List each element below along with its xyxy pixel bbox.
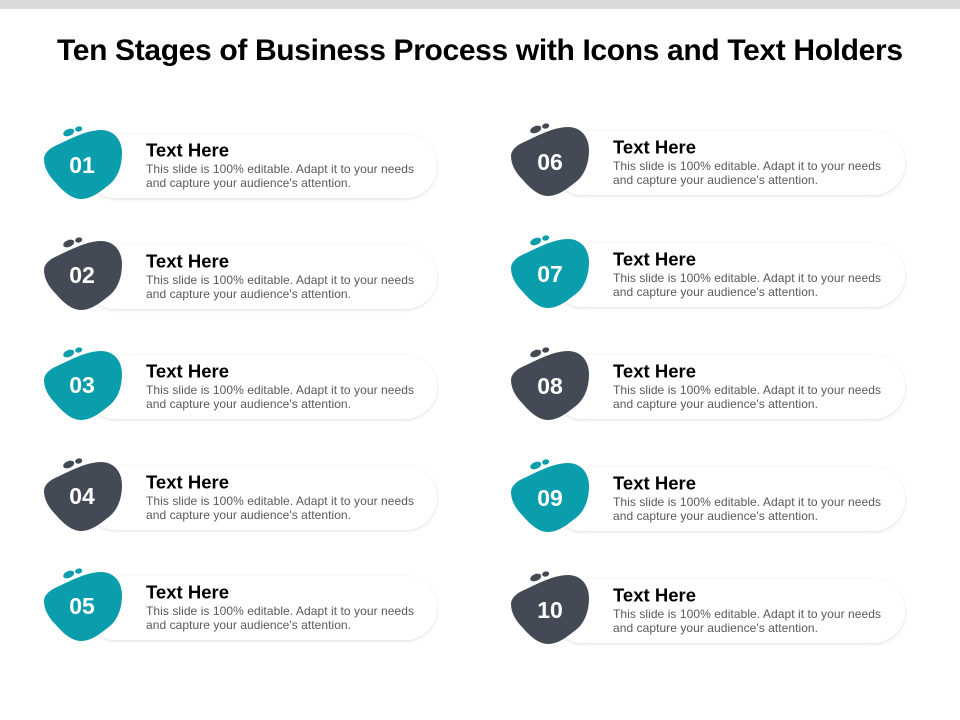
stage 06 <box>511 123 905 196</box>
description: This slide is 100% editable. Adapt it to your needs <box>613 383 881 397</box>
stage 07 <box>511 235 905 308</box>
text holder <box>551 131 905 195</box>
number: 09 <box>537 485 563 511</box>
number: 02 <box>69 262 95 288</box>
description: This slide is 100% editable. Adapt it to your needs <box>613 271 881 285</box>
heading: Text Here <box>613 472 696 494</box>
blob <box>511 347 589 420</box>
stage 02 <box>44 237 437 310</box>
heading: Text Here <box>146 140 229 160</box>
blob <box>44 237 122 310</box>
stage 04 <box>44 458 437 531</box>
blob <box>44 568 122 641</box>
text holder <box>84 466 437 530</box>
stage 05 <box>44 568 437 641</box>
stage 03 <box>44 347 437 420</box>
description: This slide is 100% editable. Adapt it to your needs <box>613 159 881 173</box>
description line 2: and capture your audience's attention. <box>613 509 818 523</box>
description line 2: and capture your audience's attention. <box>146 287 351 301</box>
text holder <box>84 355 437 419</box>
number: 05 <box>69 593 95 619</box>
description: This slide is 100% editable. Adapt it to your needs <box>146 383 414 397</box>
heading: Text Here <box>146 360 229 382</box>
stage 10 <box>511 571 905 644</box>
stage 08 <box>511 347 905 420</box>
text holder <box>551 355 905 419</box>
heading: Text Here <box>613 248 696 270</box>
text holder <box>551 243 905 307</box>
description line 2: and capture your audience's attention. <box>613 173 818 187</box>
text holder <box>84 245 437 309</box>
number: 10 <box>537 597 563 623</box>
number: 04 <box>69 483 95 509</box>
description: This slide is 100% editable. Adapt it to your needs <box>146 604 414 618</box>
description line 2: and capture your audience's attention. <box>146 508 351 522</box>
number: 03 <box>69 372 95 398</box>
heading: Text Here <box>146 472 229 492</box>
description: This slide is 100% editable. Adapt it to your needs <box>613 607 881 621</box>
stage 09 <box>511 459 905 532</box>
heading: Text Here <box>613 136 696 158</box>
number: 06 <box>537 149 563 175</box>
blob <box>511 459 589 532</box>
heading: Text Here <box>146 250 229 272</box>
description: This slide is 100% editable. Adapt it to your needs <box>613 495 881 509</box>
heading: Text Here <box>613 584 696 606</box>
blob <box>44 126 122 199</box>
blob <box>44 458 122 531</box>
blob <box>511 235 589 308</box>
heading: Text Here <box>146 582 229 602</box>
description line 2: and capture your audience's attention. <box>146 397 351 411</box>
text holder <box>551 467 905 531</box>
description line 2: and capture your audience's attention. <box>613 285 818 299</box>
stage 01 <box>44 126 437 199</box>
title: Ten Stages of Business Process with Icons and Text Holders <box>57 34 903 67</box>
description line 2: and capture your audience's attention. <box>146 618 351 632</box>
number: 01 <box>69 152 95 178</box>
description: This slide is 100% editable. Adapt it to your needs <box>146 494 414 508</box>
description: This slide is 100% editable. Adapt it to your needs <box>146 162 414 176</box>
text holder <box>84 576 437 640</box>
description: This slide is 100% editable. Adapt it to your needs <box>146 273 414 287</box>
description line 2: and capture your audience's attention. <box>146 176 351 190</box>
number: 08 <box>537 373 563 399</box>
blob <box>511 123 589 196</box>
blob <box>44 347 122 420</box>
blob <box>511 571 589 644</box>
description line 2: and capture your audience's attention. <box>613 397 818 411</box>
number: 07 <box>537 261 563 287</box>
text holder <box>84 134 437 198</box>
description line 2: and capture your audience's attention. <box>613 621 818 635</box>
top grey band <box>0 0 960 9</box>
text holder <box>551 579 905 643</box>
heading: Text Here <box>613 360 696 382</box>
